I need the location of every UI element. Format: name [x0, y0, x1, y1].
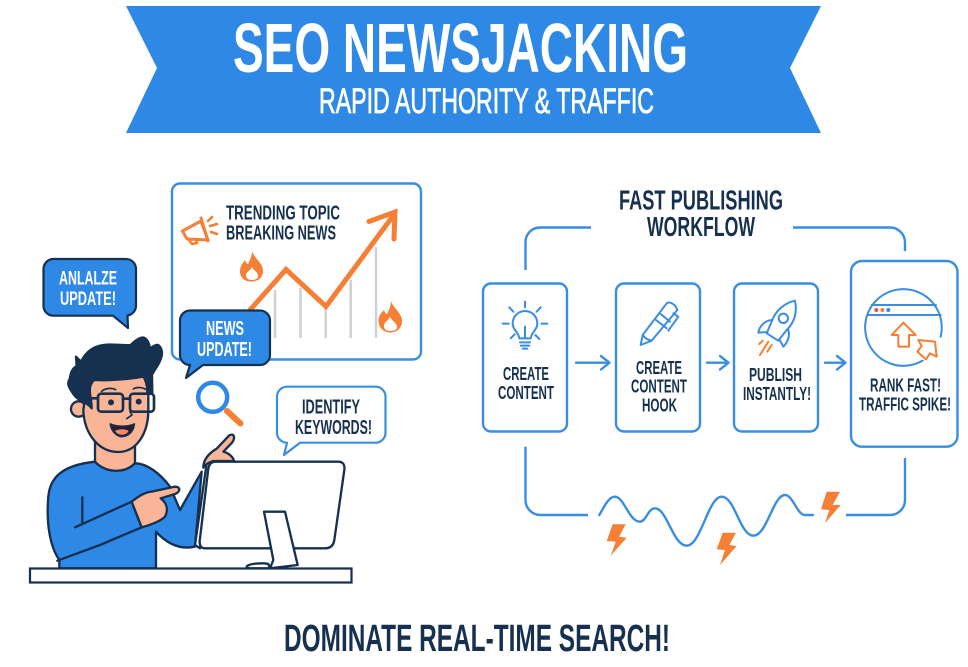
step: publish instantly: [734, 284, 818, 432]
chart gridlines: [275, 247, 376, 338]
icon: light bulb: [503, 302, 547, 349]
footer tagline: DOMINATE REAL-TIME SEARCH!: [284, 618, 670, 660]
speech bubble: news update: NEWS: [206, 317, 244, 340]
step: create content: [483, 284, 567, 432]
icon: lightning bolts: [607, 492, 841, 565]
panel heading: TRENDING TOPIC: [226, 201, 340, 224]
icon: megaphone: [182, 217, 217, 244]
desk: [30, 568, 352, 582]
speech bubble: identify keywords: IDENTIFY: [302, 396, 360, 418]
step: create content hook: CREATE: [636, 357, 682, 378]
hand pointing right: [132, 487, 179, 527]
step: create content: CREATE: [503, 363, 549, 384]
step: publish instantly: INSTANTLY!: [743, 383, 811, 404]
glasses: [91, 394, 154, 412]
speech bubble: analyze update: [43, 259, 136, 328]
title: SEO NEWSJACKING: [233, 9, 688, 87]
speech bubble: identify keywords: KEYWORDS!: [295, 417, 372, 439]
brows and nose: [102, 388, 146, 419]
signal wave: [599, 495, 813, 546]
hair: [68, 338, 162, 408]
title banner: [126, 6, 821, 133]
subtitle: RAPID AUTHORITY & TRAFFIC: [319, 82, 654, 121]
sweater: [48, 462, 202, 568]
speech bubble: news update: UPDATE!: [197, 338, 252, 361]
workflow loop connectors: [526, 228, 905, 515]
panel heading: BREAKING NEWS: [226, 221, 336, 244]
workflow heading: WORKFLOW: [647, 211, 755, 242]
workflow heading: [619, 184, 783, 242]
icon: rocket: [758, 301, 796, 355]
mouth: [110, 424, 134, 437]
step: create content: CONTENT: [498, 382, 554, 403]
ear: [71, 401, 86, 417]
trend arrow: [250, 212, 395, 310]
step: create content hook: CONTENT: [631, 376, 687, 397]
face: [83, 373, 148, 452]
workflow heading: FAST PUBLISHING: [619, 184, 783, 215]
icon: flame left: [240, 251, 263, 282]
speech bubble: analyze update: UPDATE!: [60, 288, 116, 310]
monitor: [195, 463, 213, 548]
step: create content hook: HOOK: [642, 395, 677, 416]
sleeve detail: [57, 497, 142, 561]
hand pointing up: [203, 435, 234, 468]
speech bubble: news update: [180, 310, 270, 378]
arrow: step 1 to 2: [576, 356, 610, 370]
icon: pen: [641, 303, 678, 345]
monitor stand: [247, 512, 298, 568]
icon: browser with arrows: [865, 289, 942, 366]
arrow: step 3 to 4: [825, 356, 846, 370]
panel heading: [226, 201, 340, 244]
step: publish instantly: PUBLISH: [749, 364, 802, 385]
neck: [95, 437, 135, 472]
step: create content hook: [616, 284, 700, 432]
eyes: [108, 399, 142, 405]
speech bubble: analyze update: ANLALZE: [59, 267, 117, 289]
step: rank fast: [851, 261, 958, 447]
panel: trending chart: [172, 184, 421, 360]
icon: flame right: [378, 301, 402, 332]
illustration: person at computer: [48, 338, 344, 568]
icon: magnifying glass: [198, 383, 240, 424]
speech bubble: identify keywords: [277, 387, 386, 455]
arrow: step 2 to 3: [707, 356, 728, 370]
